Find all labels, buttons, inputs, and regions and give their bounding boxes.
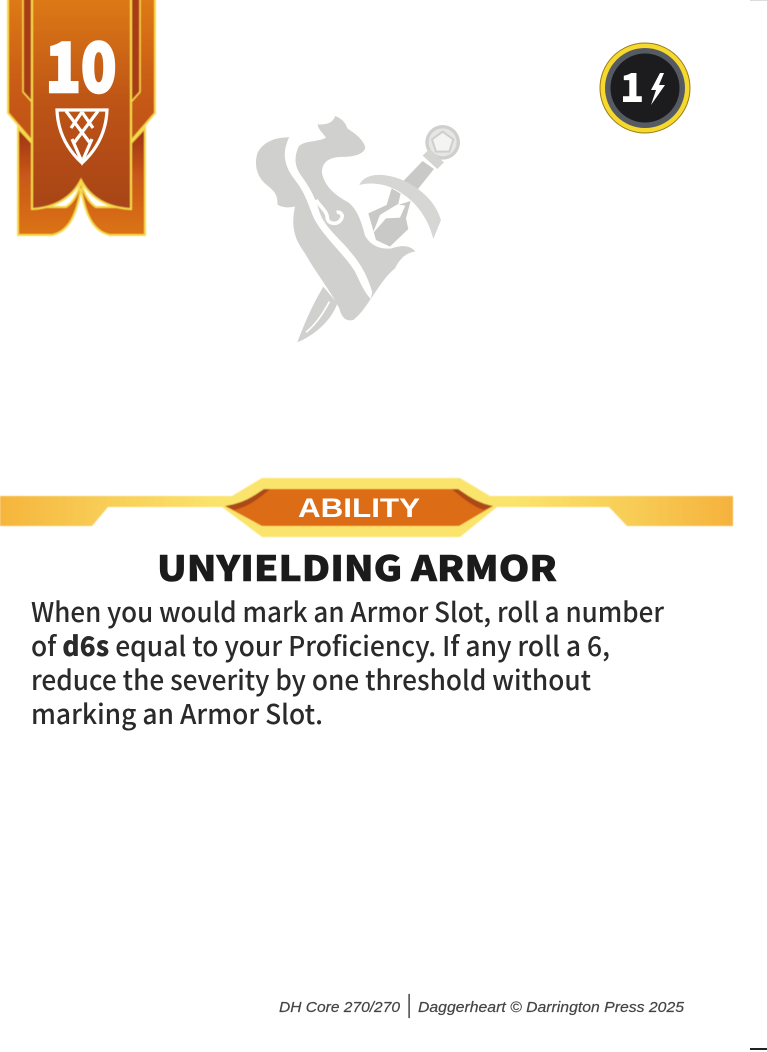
badge ring — [600, 43, 690, 133]
ribbon back tails — [18, 128, 145, 235]
card description: marking an Armor Slot. — [31, 693, 323, 732]
gold band — [0, 478, 733, 537]
orange label plate — [225, 489, 493, 526]
footer credits: Daggerheart © Darrington Press 2025 — [418, 999, 685, 1016]
dagger tip — [297, 287, 337, 342]
dragon highlight stripes — [285, 136, 372, 299]
card description — [31, 591, 665, 732]
footer credits: DH Core 270/270 — [279, 999, 401, 1016]
footer credits — [279, 994, 685, 1018]
sword — [359, 125, 460, 247]
icon: domain shield — [57, 110, 107, 163]
ability divider — [0, 478, 733, 537]
ability label: ABILITY — [298, 493, 420, 523]
level number: 10 — [46, 13, 116, 112]
dragon body — [256, 116, 415, 320]
icon: lightning bolt — [651, 73, 665, 105]
ribbon side wings — [8, 0, 32, 141]
cost badge — [600, 43, 690, 133]
card description: reduce the severity by one threshold without — [31, 659, 591, 698]
card description: of d6s equal to your Proficiency. If any roll a 6, — [31, 625, 610, 664]
ribbon: level banner — [8, 0, 155, 235]
emblem: dragon and sword — [256, 116, 460, 342]
ribbon centre panel — [32, 0, 131, 209]
card title: UNYIELDING ARMOR — [157, 541, 557, 592]
badge number: 1 — [620, 56, 644, 114]
ribbon inner stripes — [23, 0, 32, 102]
card description: When you would mark an Armor Slot, roll a number — [31, 591, 665, 630]
